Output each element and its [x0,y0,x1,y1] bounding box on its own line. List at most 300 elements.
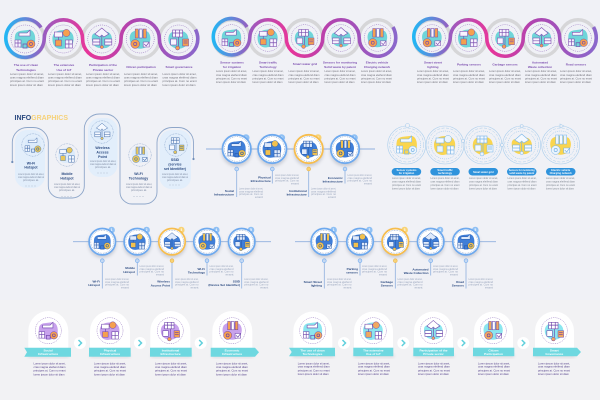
step descriptions: erant [121,285,129,289]
icon: smart traffic [255,25,281,51]
ribbon titles: The extensive [363,348,384,352]
step descriptions: cras magna eleifend [175,280,199,284]
icon: physical [97,318,123,344]
step descriptions: principes at. Cum no [468,282,494,286]
step descriptions: principes at. Cum no [275,178,300,182]
step titles: Charging network [364,65,390,69]
step descriptions: principes at. Cum no erant [252,76,284,80]
step descriptions: cras magna eleifend diam [48,76,82,80]
ribbon titles: Infrastructure [38,352,58,356]
step descriptions: cras magna eleifend [210,267,234,271]
card descriptions: Lorem ipsum dolor sit amet, [126,183,152,186]
step titles [424,60,587,69]
connector arrows [338,337,529,349]
circle shadows [310,230,480,258]
step 1 node [311,227,337,263]
step 4 node [331,134,359,171]
icon: parking sensors [455,25,482,51]
pill titles: solid waste by patent [509,171,534,175]
step descriptions: cras magna eleifend diam [560,73,592,77]
card descriptions: cras magna eleifend diam [298,365,330,369]
step descriptions: erant [485,285,493,289]
step descriptions: Lorem ipsum dolor sit amet, [324,69,356,73]
title pills [392,168,576,176]
step titles: Solid waste by patent [324,65,356,69]
step descriptions: principes at. Cum no erant [216,76,247,80]
card descriptions: lorem ipsum dolor sit diam [94,372,125,376]
card descriptions: cras magna eleifend diam [216,365,248,369]
card descriptions: lorem ipsum dolor sit diam [34,372,65,376]
dashed inner rings [390,128,578,162]
pill descriptions [392,176,576,190]
step descriptions: principes at. Cum no erant [324,76,356,80]
step titles: Participation of the [89,63,117,67]
step descriptions: Lorem ipsum dolor sit amet, [288,69,320,73]
step descriptions: cras magna eleifend [398,280,423,284]
card descriptions: lorem ipsum dolor sit diam [418,372,449,376]
icon: wireless access point [91,121,113,143]
step labels [88,266,241,288]
grey rings [6,20,198,58]
icon: waste collection [528,25,555,51]
step descriptions: Lorem ipsum dolor sit amet, [525,69,557,73]
step labels: Infrastructure [214,192,234,196]
step 4 node: 4 [439,228,441,232]
card descriptions: cras magna eleifend diam [34,365,66,369]
icon: citizen participation [126,25,154,53]
card descriptions: principes at. Cum no erant [478,368,510,372]
step descriptions: erant [255,195,263,199]
step 1 node [222,134,251,171]
step labels: Physical [258,176,271,180]
step descriptions: principes at. Cum no erant [525,76,557,80]
card titles: Wireless [95,146,110,150]
step 1 node: 1 [245,136,247,140]
card descriptions: cras magna eleifend diam [478,365,510,369]
step descriptions: Lorem ipsum dolor sit amet, [244,277,268,281]
pill descriptions: cras magna eleifend diam [469,180,499,184]
step descriptions: cras magna eleifend [140,267,165,271]
step descriptions: principes at. Cum no erant [560,76,592,80]
step descriptions: principes at. Cum no [175,282,199,286]
card descriptions: cras magna eleifend diam [155,365,187,369]
card descriptions: principes at. [95,166,111,169]
step descriptions: lorem ipsum dolor sit diam [48,83,81,87]
icon: road sensors [565,25,591,51]
card descriptions: lorem ipsum dolor sit diam [155,372,186,376]
step descriptions: lorem ipsum dolor sit diam [162,83,196,87]
pill titles: technology [438,171,452,175]
gradient ribbon [213,18,396,56]
card descriptions: Lorem ipsum dolor sit amet, [358,361,390,365]
pill descriptions: principes at. Cum no erant [546,183,575,187]
step labels: Wireless [157,280,170,284]
teal ribbons [289,348,581,356]
step labels [214,176,343,196]
panel: wi-fi timeline [73,227,271,289]
step descriptions: Lorem ipsum dolor sit amet, [48,72,82,76]
step descriptions: cras magna eleifend diam [124,76,158,80]
gradient ribbon [6,19,198,58]
step descriptions: Lorem ipsum dolor sit amet, [162,72,197,76]
icon: irrigation [393,131,421,159]
panel: yellow smart city circles [388,124,580,190]
step titles: The use of clean [14,63,38,67]
pill descriptions: Lorem ipsum dolor sit amet, [508,176,537,180]
ribbon titles [38,348,242,356]
step descriptions: principes at. Cum no erant [124,79,158,83]
step descriptions: lorem ipsum dolor sit diam [324,80,355,84]
step labels: Institutional [289,189,307,193]
step descriptions: Lorem ipsum dolor sit amet, [361,69,392,73]
pagination dots [26,172,180,197]
step titles: Waste collection [528,65,552,69]
card descriptions: principes at. [167,179,183,182]
step titles: Road sensors [566,62,587,66]
step labels: Garbage [380,280,393,284]
pill descriptions: cras magna eleifend diam [508,180,537,184]
ribbon titles: Citizen [488,348,499,352]
panel: wi-fi cards [11,113,195,204]
step descriptions: lorem ipsum dolor sit diam [252,80,283,84]
panel: infrastructure timeline [206,134,375,199]
card descriptions: Lorem ipsum dolor sit amet, [90,160,116,163]
ribbon titles [300,348,564,356]
step descriptions: Lorem ipsum dolor sit amet, [398,277,423,281]
card descriptions: Lorem ipsum dolor sit amet, [54,183,80,186]
icon: garbage sensors [492,25,518,51]
card descriptions: Lorem ipsum dolor sit amet, [155,361,187,365]
ribbon titles: Participation of the [419,348,448,352]
step descriptions: Lorem ipsum dolor sit amet, [417,69,449,73]
step titles: Automated [532,60,548,64]
card descriptions: cras magna eleifend diam [94,365,126,369]
ribbon shadows [28,354,253,358]
step 2 node: 2 [281,136,283,140]
step descriptions: erant [364,181,372,185]
step descriptions: Lorem ipsum dolor sit amet, [275,173,299,177]
card descriptions: cras magna eleifend diam at [162,176,188,179]
step titles: Sensor systems [220,60,244,64]
card descriptions: cras magna eleifend diam [538,365,570,369]
white arches [28,311,252,349]
pill titles: Sensor systems [397,168,417,172]
card descriptions: principes at. Cum no erant [538,368,570,372]
card descriptions: Lorem ipsum dolor sit amet, [94,361,126,365]
ribbon titles: Private sector [423,352,445,356]
panel: smart city arch cards [289,312,581,376]
step titles: lighting [427,65,439,69]
step 2 node: 2 [368,228,370,232]
step descriptions: cras magna eleifend diam [162,76,197,80]
step descriptions: principes at. Cum no [433,270,459,274]
pill descriptions: principes at. Cum no erant [392,183,421,187]
card titles [24,146,186,180]
step descriptions [105,264,269,289]
step descriptions: lorem ipsum dolor sit diam [124,83,157,87]
step labels: Parking [347,267,358,271]
step descriptions [239,173,373,199]
step descriptions: cras magna eleifend diam [453,73,485,77]
connector arrows [74,337,207,349]
step labels: Hotspot [123,270,135,274]
step 1 node [89,227,116,263]
step titles: Smart street [424,60,442,64]
lower band background [0,300,600,400]
pill descriptions: Lorem ipsum dolor sit amet, [546,176,575,180]
step titles: Citizen participation [126,65,156,69]
card descriptions [18,160,188,192]
step descriptions: cras magna eleifend [468,280,494,284]
step labels: Sensors [452,284,464,288]
card titles: Access [96,150,109,154]
icon: smart governance [165,25,193,53]
step descriptions: erant [414,285,423,289]
card titles: Mobile [61,172,73,176]
ribbon titles: The use of clean [300,348,325,352]
icon: vehicle charging [364,25,391,51]
step labels: sensors [346,270,358,274]
white arches [293,312,574,349]
ribbon titles: Economic [225,348,240,352]
ribbon titles: Institutional [162,348,179,352]
step labels: Access Point [151,284,170,288]
step descriptions: Lorem ipsum dolor sit amet, [252,69,284,73]
step descriptions: cras magna eleifend diam [525,73,557,77]
step labels: Smart Street [304,280,322,284]
pill titles: for irrigation [399,171,415,175]
step descriptions: lorem ipsum dolor sit diam [86,83,119,87]
teal ribbons [24,348,259,357]
pill descriptions: lorem ipsum dolor sit diam [508,186,536,190]
step 5 node: 5 [474,228,476,232]
vertical connectors [237,169,345,197]
pill descriptions: cras magna eleifend diam [546,180,576,184]
step descriptions: erant [344,285,352,289]
icon: street lighting [419,25,445,51]
icon: internet of things [49,25,77,53]
step descriptions: cras magna eleifend diam [288,73,320,77]
step descriptions: cras magna eleifend [311,189,337,193]
panel: snake timeline 1 [6,19,198,87]
step titles: Use of IoT [57,68,72,72]
step 2 node [258,134,286,171]
step descriptions: cras magna eleifend diam [252,73,284,77]
icon: charging [547,131,575,159]
icon: traffic [431,131,459,159]
card descriptions: principes at. [23,179,39,182]
step descriptions: Lorem ipsum dolor sit amet, [10,72,44,76]
step labels: Infrastructure [323,180,343,184]
step labels: Wi-Fi [197,267,205,271]
card descriptions: cras magna eleifend diam [358,365,390,369]
card descriptions: principes at. Cum no erant [418,368,450,372]
circle shadows [88,230,256,258]
icon: institutional [157,318,183,344]
panel: infrastructure arch cards [24,311,259,376]
step descriptions [10,72,197,87]
step descriptions: principes at. Cum no erant [10,79,44,83]
ribbon titles: Infrastructure [160,352,181,356]
step labels: Technology [188,270,205,274]
step descriptions: principes at. Cum no erant [48,79,82,83]
icon: ssid [165,134,187,156]
step descriptions: lorem ipsum dolor sit diam [216,80,246,84]
ribbon titles: Social [43,348,53,352]
step titles [220,60,390,69]
icon: wi-fi hotspot [22,134,44,156]
step titles: Smart governance [166,65,193,69]
gradient ribbon [414,18,596,56]
step descriptions: Lorem ipsum dolor sit amet, [140,264,164,268]
card descriptions: principes at. Cum no erant [358,368,390,372]
step descriptions: cras magna eleifend [362,267,388,271]
icon: smart water grid [291,25,318,51]
ribbon shadows [293,354,575,358]
panel: snake timeline 3 [414,18,596,84]
horizontal axis [206,148,375,150]
step descriptions: principes at. Cum no erant [361,76,392,80]
step descriptions: lorem ipsum dolor sit diam [489,80,520,84]
ribbon titles: Technologies [303,352,323,356]
step titles: Technology [259,65,277,69]
outer rings [388,126,580,164]
step descriptions: principes at. Cum no [105,282,130,286]
step 4 node: 4 [353,136,355,140]
step descriptions: principes at. Cum no [348,178,373,182]
step descriptions: principes at. Cum no erant [162,79,197,83]
card descriptions: cras magna eleifend diam at [54,186,80,189]
step descriptions [417,69,592,84]
step descriptions: principes at. Cum no erant [489,76,521,80]
icon: private sector [88,25,116,53]
step labels: Mobile [125,266,135,270]
step descriptions: cras magna eleifend diam [216,73,247,77]
step 5 node: 5 [250,228,252,232]
card descriptions: principes at. Cum no erant [216,369,248,373]
icon: social [35,318,61,344]
pill titles [397,168,572,175]
card descriptions: Lorem ipsum dolor sit amet, [478,361,510,365]
card descriptions: Lorem ipsum dolor sit amet, [538,361,570,365]
card titles: Wi-Fi [27,162,35,166]
icon: mobile hotspot [56,144,78,166]
step descriptions: Lorem ipsum dolor sit amet, [86,72,120,76]
ribbon titles: Physical [104,348,116,352]
step descriptions: cras magna eleifend diam [489,73,521,77]
step descriptions: erant [450,272,458,276]
step descriptions: cras magna eleifend [239,189,264,193]
vertical connectors [102,261,242,288]
step descriptions: principes at. Cum no [210,270,234,274]
icon: water grid [469,131,497,159]
step descriptions: cras magna eleifend diam [361,73,392,77]
card descriptions: Lorem ipsum dolor sit amet, [162,173,188,176]
step descriptions: Lorem ipsum dolor sit amet, [210,264,234,268]
card titles: Point [98,155,108,159]
step 2 node [347,227,373,263]
step 3 node: 3 [180,228,182,232]
icon: private sector [420,318,446,344]
step descriptions: Lorem ipsum dolor sit amet, [468,277,493,281]
step descriptions: lorem ipsum dolor sit diam [453,80,484,84]
step descriptions: Lorem ipsum dolor sit amet, [327,277,352,281]
card descriptions: principes at. Cum no erant [94,369,126,373]
step descriptions: principes at. Cum no [398,282,423,286]
card descriptions: cras magna eleifend diam at [126,186,152,189]
step 1 node: 1 [111,228,113,232]
step labels: SSID [233,280,241,284]
step titles: Smart traffic [259,60,277,64]
step labels: Hotspot [88,283,100,287]
step descriptions: cras magna eleifend [433,267,459,271]
icon: internet of things [360,318,386,344]
step 3 node [382,227,408,263]
step descriptions: cras magna eleifend diam [417,73,449,77]
step descriptions: cras magna eleifend [348,176,373,180]
card titles: Hotspot [60,176,74,180]
card titles: SSID [171,158,180,162]
step 3 node [294,134,323,171]
icon: solid waste [508,131,536,159]
card titles: Hotspot [24,166,38,170]
card descriptions: lorem ipsum dolor sit diam [478,372,509,376]
icon: clean technologies [300,318,326,344]
pill descriptions: principes at. Cum no erant [508,183,537,187]
step descriptions [327,264,494,289]
horizontal axis [73,241,271,243]
card titles: (service [168,162,182,166]
card descriptions: Lorem ipsum dolor sit amet, [418,361,450,365]
panel: smart sensors timeline [295,227,496,289]
step descriptions: erant [260,285,269,289]
card descriptions: cras magna eleifend diam at [18,176,44,179]
step descriptions: principes at. Cum no erant [86,79,120,83]
step titles: Parking sensors [457,62,481,66]
step 2 node: 2 [146,228,148,232]
step descriptions: erant [291,181,299,185]
pill titles: Smart water grid [473,170,494,174]
step 3 node: 3 [317,136,319,140]
grey rings [213,20,396,56]
step descriptions: principes at. Cum no [244,282,269,286]
step descriptions: Lorem ipsum dolor sit amet, [362,264,387,268]
step 4 node [194,227,220,263]
pill titles: Smart traffic [437,168,453,172]
icon: economic [219,318,245,344]
pill titles: Sensors for monitoring [509,168,535,172]
step labels: Wi-Fi [92,280,100,284]
step labels: Sensors [381,284,393,288]
connecting outline [12,114,193,204]
ring top markers [406,124,564,146]
icon: solid waste sensors [328,25,354,51]
step descriptions: lorem ipsum dolor sit diam [288,80,319,84]
panel: snake timeline 2 [213,18,396,84]
step titles: Smart water grid [293,62,317,66]
pill descriptions: principes at. Cum no erant [430,183,460,187]
step labels: Infrastructure [287,192,307,196]
step descriptions: lorem ipsum dolor sit diam [10,83,43,87]
step descriptions: cras magna eleifend [275,176,300,180]
step descriptions: cras magna eleifend diam [10,76,44,80]
pill descriptions: lorem ipsum dolor sit diam [430,186,459,190]
step descriptions: erant [156,272,164,276]
step descriptions: Lorem ipsum dolor sit amet, [489,69,521,73]
step descriptions: Lorem ipsum dolor sit amet, [216,69,247,73]
step labels: Infrastructure [251,179,271,183]
step labels: Economic [328,176,343,180]
